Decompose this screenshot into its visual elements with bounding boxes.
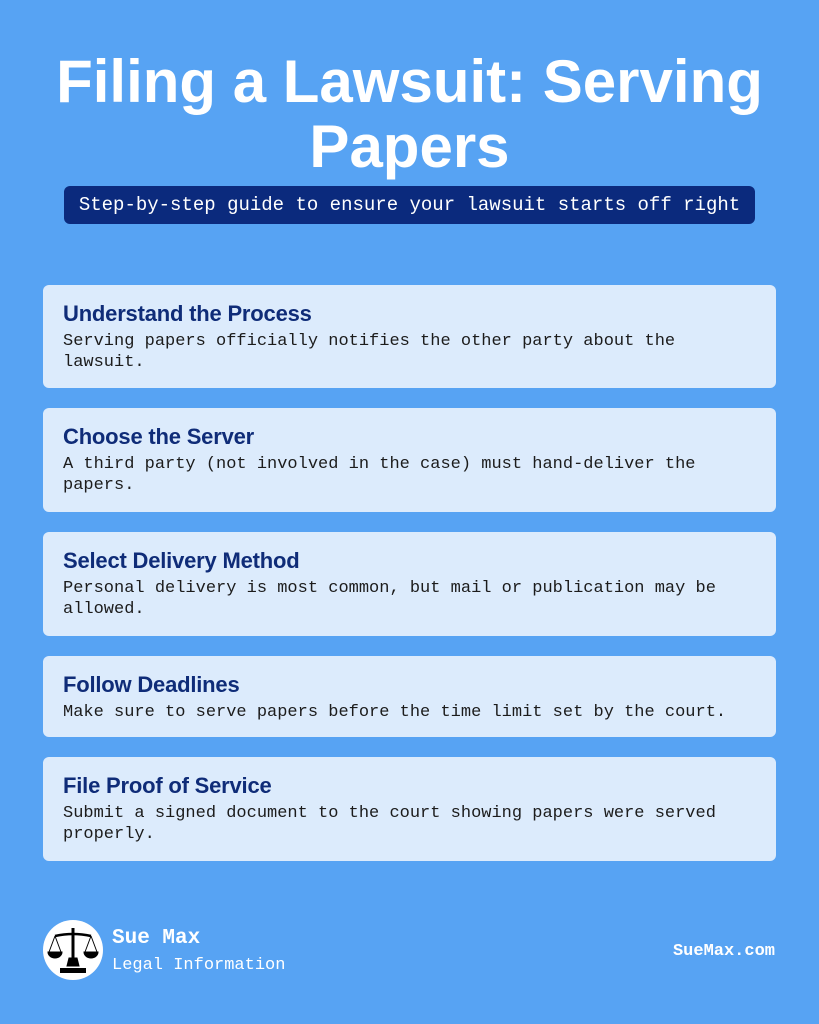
title	[56, 48, 763, 180]
panel: follow deadlines: Make sure to serve papers before the time limit set by the court.	[63, 703, 726, 722]
title: Filing a Lawsuit: Serving	[56, 48, 763, 115]
panel: understand the process	[43, 285, 776, 388]
panel: file proof of service	[43, 757, 776, 861]
panel: follow deadlines: Follow Deadlines	[63, 672, 240, 697]
brand text	[112, 927, 285, 975]
panel: follow deadlines	[43, 656, 776, 737]
panel: choose the server: A third party (not involved in the case) must hand-deliver the papers.	[63, 455, 696, 495]
website: SueMax.com	[673, 942, 775, 961]
panel: file proof of service: File Proof of Service	[63, 773, 272, 798]
title: Papers	[309, 113, 510, 180]
panel: select delivery method: Select Delivery Method	[63, 548, 299, 573]
brand text: Sue Max	[112, 927, 200, 950]
panel: file proof of service: Submit a signed document to the court showing papers were served properly.	[63, 804, 716, 844]
panel: understand the process: Understand the Process	[63, 301, 312, 326]
panel: understand the process: Serving papers officially notifies the other party about the lawsuit.	[63, 332, 675, 372]
subtitle banner	[64, 186, 755, 224]
panel: choose the server: Choose the Server	[63, 424, 254, 449]
panel: select delivery method	[43, 532, 776, 636]
panel: choose the server	[43, 408, 776, 512]
subtitle banner: Step-by-step guide to ensure your lawsuit starts off right	[79, 194, 740, 216]
icon: scales of justice logo	[43, 920, 103, 980]
brand text: Legal Information	[112, 956, 285, 975]
panel: select delivery method: Personal delivery is most common, but mail or publication may be allowed.	[63, 579, 716, 619]
